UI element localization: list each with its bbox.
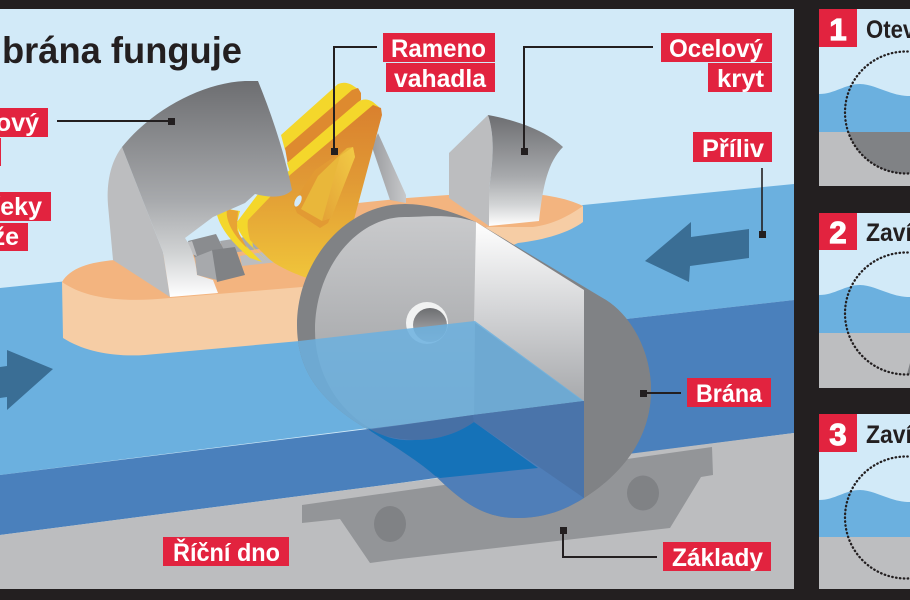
label: Základy (560, 527, 771, 572)
rear arm plate (217, 209, 262, 262)
panel: step 1 (819, 9, 910, 186)
water over gate (290, 321, 584, 530)
concrete pier front (62, 206, 583, 355)
step 3 water (819, 490, 910, 537)
left steel cover (108, 81, 292, 297)
step 2 dotted circle (845, 252, 910, 374)
gate side ring (297, 204, 651, 518)
label: Ocelový kryt right: Ocelový (669, 35, 763, 63)
panel: step 2 (819, 213, 910, 388)
label: Rameno vahadla: vahadla (394, 65, 487, 93)
gate front face (474, 222, 584, 402)
step 1 river bed (819, 132, 910, 186)
panel: step 3 (819, 414, 910, 589)
steel rod behind arm (372, 133, 406, 203)
concrete pier top (62, 193, 583, 300)
rocker arm (yellow) (217, 83, 382, 278)
step 1 number: 1 (829, 12, 847, 47)
step 2 sky (819, 213, 910, 297)
radial gate (290, 204, 651, 530)
step 3 dotted circle (845, 456, 910, 578)
step 1 number badge (819, 9, 857, 47)
step 3 number: 3 (829, 417, 847, 452)
gate pivot hub (406, 302, 448, 344)
gate foundations (302, 447, 713, 563)
step 1 dotted circle (845, 52, 910, 174)
right steel cover (449, 115, 563, 226)
label: Ocelový kryt left (0, 108, 175, 166)
hydraulic pistons (185, 234, 278, 282)
step 1 sky (819, 9, 910, 96)
label: řeky / že (0, 192, 51, 251)
front yellow strip (287, 100, 379, 178)
step 2 water (819, 285, 910, 333)
step 1 gate (848, 132, 910, 174)
label: Ocelový kryt right: kryt (717, 65, 765, 93)
arm body (248, 105, 382, 278)
gate end sector (584, 288, 651, 498)
label: Rameno vahadla: Rameno (391, 35, 486, 63)
label: Ocelový kryt right (521, 33, 772, 155)
label: Brána: Brána (696, 380, 763, 408)
gate inner disc (315, 216, 476, 440)
step 1 water (819, 84, 910, 132)
label: Příliv (693, 132, 772, 238)
label: Brána (640, 378, 771, 408)
step 3 sky (819, 414, 910, 502)
label: Rameno vahadla (331, 33, 495, 155)
inflow arrow right (645, 222, 749, 282)
step 2 number badge (819, 213, 857, 250)
step 3 number badge (819, 414, 857, 452)
rear yellow strip (281, 83, 358, 150)
river bed (0, 433, 794, 589)
step 2 number: 2 (829, 215, 847, 250)
arm yellow side (237, 170, 296, 262)
label: Říční dno: Říční dno (173, 537, 280, 567)
step 2 river bed (819, 333, 910, 388)
surface water left (0, 281, 650, 475)
arm slot (293, 147, 355, 228)
label: Příliv: Příliv (702, 135, 764, 163)
inflow arrow left (0, 350, 53, 410)
step 3 river bed (819, 537, 910, 589)
title: brána funguje (2, 30, 242, 71)
deep water band right (600, 300, 794, 458)
deep water band left (0, 392, 650, 535)
label: Základy: Základy (672, 544, 763, 572)
step 2 gate tip (907, 363, 910, 374)
surface water right (500, 184, 794, 330)
rear orange strip (285, 88, 361, 165)
